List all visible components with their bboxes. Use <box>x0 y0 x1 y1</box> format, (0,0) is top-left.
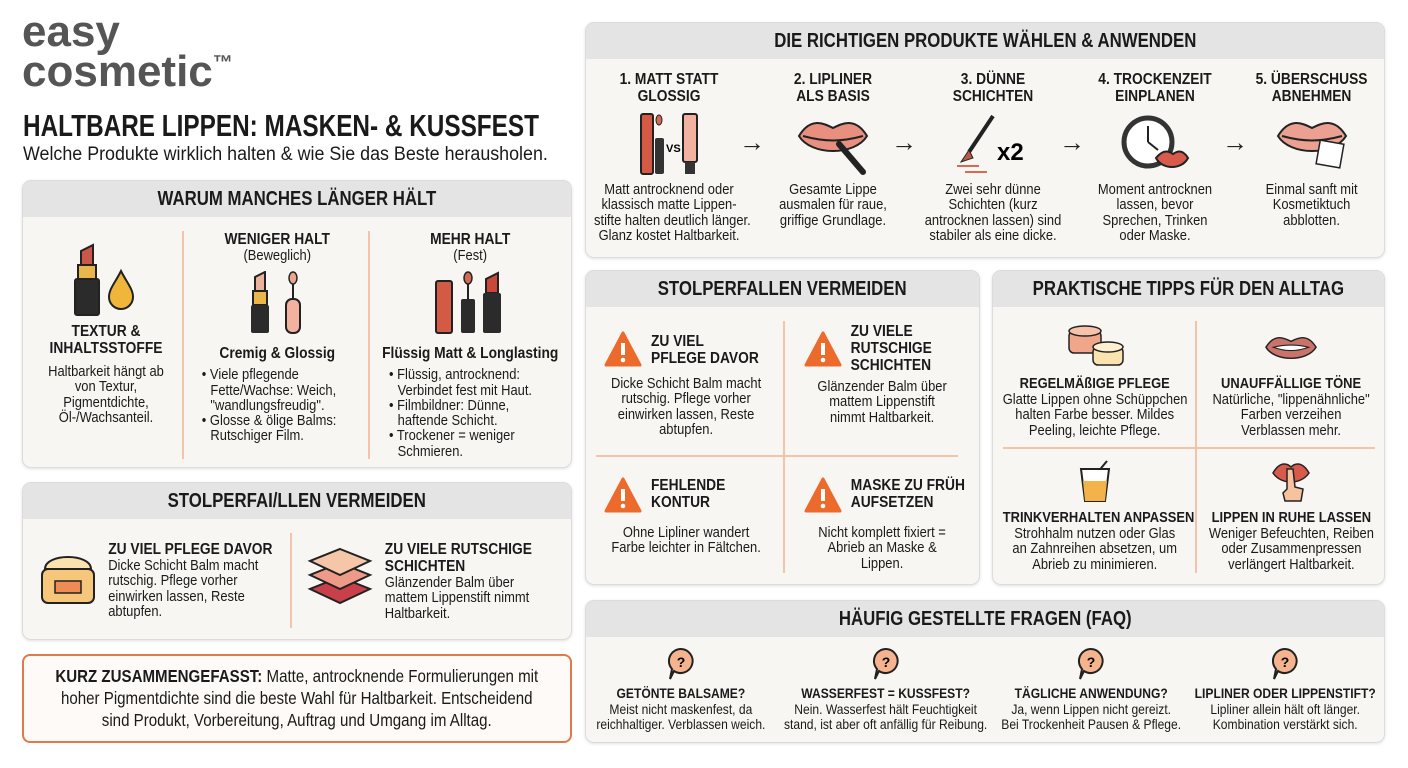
text: zu viel pflege: einwirken lassen, Reste <box>108 588 245 605</box>
faq 4: Kombination verstärkt sich. <box>1213 716 1357 732</box>
heading: PRAKTISCHE TIPPS FÜR DEN ALLTAG <box>1033 278 1344 300</box>
cell: maske zu früh: Nicht komplett fixiert = <box>818 524 946 541</box>
col3: • Trockener = weniger <box>389 427 515 444</box>
text: zu viel pflege: abtupfen. <box>108 603 162 620</box>
faq 3 <box>1001 648 1181 732</box>
cell: zu viele rutschige schichten: mattem Lippenstift <box>829 393 935 410</box>
col3: • Filmbildner: Dünne, <box>389 397 509 414</box>
col3 <box>382 231 558 460</box>
tip: lippen in ruhe lassen: oder Zusammenpressen <box>1221 540 1361 557</box>
text: zu viele rutschige schichten: SCHICHTEN <box>385 558 465 575</box>
summary callout: sind Produkt, Vorbereitung, Auftrag und Umgang im Alltag. <box>102 710 492 730</box>
cell: zu viele rutschige schichten: RUTSCHIGE <box>851 340 932 357</box>
step 1: klassisch matte Lippen- <box>601 196 737 213</box>
heading <box>586 271 979 307</box>
faq 4 <box>1194 648 1376 732</box>
step 1: Matt antrocknend oder <box>604 181 734 198</box>
cell: zu viel pflege: PFLEGE DAVOR <box>651 350 759 367</box>
heading: HÄUFIG GESTELLTE FRAGEN (FAQ) <box>839 608 1131 630</box>
heading: STOLPERFALLEN VERMEIDEN <box>658 278 907 300</box>
step 4: Moment antrocknen <box>1098 181 1212 198</box>
text: zu viele rutschige schichten: mattem Lippenstift nimmt <box>385 589 529 606</box>
tip: unauffällige töne: Verblassen mehr. <box>1241 422 1341 439</box>
col3: Schmieren. <box>398 443 463 460</box>
icon: matte vs gloss <box>640 113 698 175</box>
faq 4: ? <box>1281 654 1289 670</box>
step 3: Zwei sehr dünne <box>945 181 1041 198</box>
col3: Verbindet fest mit Haut. <box>398 382 532 399</box>
cell: zu viel pflege: ZU VIEL <box>651 333 704 350</box>
heading: DIE RICHTIGEN PRODUKTE WÄHLEN & ANWENDEN <box>774 30 1196 52</box>
step 3: 3. DÜNNE <box>961 71 1025 88</box>
col1 text <box>48 323 164 426</box>
tip: lippen in ruhe lassen <box>1208 463 1374 573</box>
summary callout: KURZ ZUSAMMENGEFASST: Matte, antrocknende Formulierungen mit <box>56 666 538 686</box>
col2: • Glosse & ölige Balms: <box>202 412 337 429</box>
faq 2: Nein. Wasserfest hält Feuchtigkeit <box>795 701 977 717</box>
cell: fehlende kontur: FEHLENDE <box>651 477 725 494</box>
col2: WENIGER HALT <box>224 231 330 248</box>
tip: trinkverhalten <box>1002 460 1195 573</box>
col2: Fette/Wachse: Weich, <box>211 382 336 399</box>
tip: regelmäßige pflege: REGELMÄßIGE PFLEGE <box>1020 375 1170 392</box>
faq 4: LIPLINER ODER LIPPENSTIFT? <box>1194 685 1376 701</box>
panel: stolperfallen links <box>22 482 572 640</box>
step 2: Gesamte Lippe <box>789 181 877 198</box>
arrow: → <box>1059 127 1085 157</box>
col3: • Flüssig, antrocknend: <box>389 366 520 383</box>
step 4: lassen, bevor <box>1117 196 1193 213</box>
col2 <box>202 231 337 444</box>
tip: lippen in ruhe lassen: verlängert Haltbarkeit. <box>1228 556 1354 573</box>
tip: trinkverhalten: Strohhalm nutzen oder Glas <box>1014 525 1176 542</box>
faq 3: ? <box>1087 654 1095 670</box>
summary callout <box>22 654 572 743</box>
step 4: oder Maske. <box>1119 227 1191 244</box>
icon: lips with liner <box>798 122 868 175</box>
icon: balm jar <box>41 556 95 604</box>
col1 text: Haltbarkeit hängt ab <box>48 363 164 380</box>
cell: maske zu früh: Lippen. <box>861 555 903 572</box>
text: zu viele rutschige schichten: Glänzender Balm über <box>385 574 514 591</box>
faq 2 <box>784 648 988 732</box>
arrow: → <box>891 127 917 157</box>
cell: zu viele rutschige schichten <box>804 323 947 426</box>
cell: maske zu früh: MASKE ZU FRÜH <box>851 477 965 494</box>
col3: MEHR HALT <box>430 231 510 248</box>
panel: praktische tipps <box>992 270 1385 585</box>
step 1: 1. MATT STATT <box>620 71 718 88</box>
col1 text: von Textur, <box>75 378 137 395</box>
icon: brush x2 <box>957 114 1024 173</box>
heading <box>993 271 1384 307</box>
faq 2: ? <box>882 654 890 670</box>
icon: clock and lips <box>1122 116 1190 168</box>
panel: stolperfallen vermeiden (rechts) <box>585 270 980 585</box>
tip: trinkverhalten: TRINKVERHALTEN ANPASSEN <box>1003 509 1195 526</box>
step 5: abblotten. <box>1284 212 1340 229</box>
step 2 <box>779 71 887 229</box>
tip: regelmäßige pflege: halten Farbe besser. Mildes <box>1016 406 1174 423</box>
heading: WARUM MANCHES LÄNGER HÄLT <box>158 188 436 210</box>
cell: zu viel pflege: rutschig. Pflege vorher <box>621 390 751 407</box>
tip: unauffällige töne: Farben verzeihen <box>1241 406 1341 423</box>
logo: cosmetic™ <box>22 47 233 96</box>
step 4: EINPLANEN <box>1115 88 1195 105</box>
cell: zu viele rutschige schichten: nimmt Haltbarkeit. <box>830 409 934 426</box>
col1 text: TEXTUR & <box>72 323 140 340</box>
step 1: stifte halten deutlich länger. <box>594 212 751 229</box>
heading <box>23 181 571 217</box>
cell: zu viel pflege: abtupfen. <box>659 421 713 438</box>
faq 2: WASSERFEST = KUSSFEST? <box>802 685 970 701</box>
step 3: Schichten (kurz <box>948 196 1038 213</box>
text: zu viel pflege: rutschig. Pflege vorher <box>108 572 237 589</box>
icon: lipstick and drop <box>74 243 134 316</box>
panel: FAQ <box>585 600 1385 743</box>
step 2: ALS BASIS <box>796 88 870 105</box>
cell: fehlende kontur: Farbe leichter in Fältchen. <box>611 539 761 556</box>
col2: • Viele pflegende <box>202 366 299 383</box>
tip: regelmäßige pflege: Glatte Lippen ohne Schüppchen <box>1003 391 1188 408</box>
col2: Rutschiger Film. <box>211 427 304 444</box>
text: zu viele rutschige schichten: Haltbarkeit. <box>385 605 450 622</box>
tip: trinkverhalten: Abrieb zu minimieren. <box>1032 556 1158 573</box>
text: zu viel pflege <box>108 541 272 620</box>
step 5 <box>1256 70 1368 229</box>
step 2: ausmalen für raue, <box>779 196 887 213</box>
tip: unauffällige töne <box>1212 337 1370 439</box>
arrow: → <box>1222 127 1248 157</box>
col3: Flüssig Matt & Longlasting <box>382 345 558 362</box>
icon: liquid matte and longlasting <box>435 271 501 334</box>
cell: maske zu früh <box>804 476 965 572</box>
text: zu viele rutschige schichten: ZU VIELE RUTSCHIGE <box>385 541 532 558</box>
icon: brush x2: x2 <box>997 139 1024 166</box>
col1 text: Öl-/Wachsanteil. <box>59 409 153 426</box>
cell: fehlende kontur <box>604 477 761 556</box>
tip: regelmäßige pflege <box>1003 325 1188 439</box>
text: zu viel pflege: ZU VIEL PFLEGE DAVOR <box>108 541 272 558</box>
faq 1: Meist nicht maskenfest, da <box>610 701 752 717</box>
col1 text: INHALTSSTOFFE <box>50 340 162 357</box>
col2: Cremig & Glossig <box>219 345 335 362</box>
cell: zu viel pflege: Dicke Schicht Balm macht <box>611 375 761 392</box>
step 1: GLOSSIG <box>638 88 700 105</box>
tip: lippen in ruhe lassen: Weniger Befeuchten, Reiben <box>1208 525 1374 542</box>
faq 1: reichhaltiger. Verblassen weich. <box>596 716 766 732</box>
text: zu viele rutschige schichten <box>385 541 532 622</box>
step 4: Sprechen, Trinken <box>1103 212 1207 229</box>
faq 1: GETÖNTE BALSAME? <box>617 685 745 701</box>
step 5: Kosmetiktuch <box>1273 196 1351 213</box>
col2: (Beweglich) <box>243 247 311 264</box>
title: HALTBARE LIPPEN: MASKEN- & KUSSFEST <box>23 108 539 143</box>
faq 3: Bei Trockenheit Pausen & Pflege. <box>1001 716 1181 732</box>
heading <box>586 601 1384 637</box>
heading <box>586 23 1384 59</box>
step 3: antrocknen lassen) sind <box>925 212 1061 229</box>
col1 text: Pigmentdichte, <box>63 394 149 411</box>
tip: unauffällige töne: Natürliche, "lippenähnliche" <box>1212 391 1370 408</box>
faq 3: TÄGLICHE ANWENDUNG? <box>1014 685 1168 701</box>
cell: zu viele rutschige schichten: Glänzender Balm über <box>817 378 947 395</box>
cell: fehlende kontur: Ohne Lipliner wandert <box>623 524 749 541</box>
panel: warum manches länger hält <box>22 180 572 468</box>
logo <box>22 7 233 96</box>
step 2: 2. LIPLINER <box>794 71 872 88</box>
step 4: 4. TROCKENZEIT <box>1098 71 1212 88</box>
tip: regelmäßige pflege: Peeling, leichte Pflege. <box>1029 422 1161 439</box>
text: zu viel pflege: Dicke Schicht Balm macht <box>108 557 258 574</box>
faq 4: Lipliner allein hält oft länger. <box>1210 701 1360 717</box>
faq 2: stand, ist aber oft anfällig für Reibung. <box>784 716 988 732</box>
panel: produkte wählen & anwenden <box>585 22 1385 258</box>
step 3: SCHICHTEN <box>953 88 1033 105</box>
icon: layers <box>308 548 372 604</box>
logo: easy <box>22 7 120 56</box>
col3: (Fest) <box>453 247 487 264</box>
subtitle: Welche Produkte wirklich halten & wie Sie das Beste herausholen. <box>23 144 548 165</box>
step 3 <box>925 70 1061 244</box>
tip: trinkverhalten: an Zahnreihen absetzen, um <box>1013 540 1177 557</box>
cell: zu viel pflege <box>604 331 762 438</box>
icon: cream lipstick and gloss <box>251 271 301 334</box>
step 4 <box>1098 71 1212 244</box>
cell: fehlende kontur: KONTUR <box>651 494 710 511</box>
cell: zu viel pflege: einwirken lassen, Reste <box>618 406 754 423</box>
icon: lips with tissue <box>1276 122 1348 169</box>
tip: lippen in ruhe lassen: LIPPEN IN RUHE LASSEN <box>1211 509 1371 526</box>
step 5: 5. ÜBERSCHUSS <box>1256 71 1368 88</box>
cell: maske zu früh: AUFSETZEN <box>851 494 934 511</box>
heading: STOLPERFAI/LLEN VERMEIDEN <box>168 490 426 512</box>
faq 1: ? <box>677 654 685 670</box>
step 1: Glanz kostet Haltbarkeit. <box>599 227 739 244</box>
step 5: Einmal sanft mit <box>1266 181 1358 198</box>
cell: zu viele rutschige schichten: ZU VIELE <box>851 323 913 340</box>
summary callout: hoher Pigmentdichte sind die beste Wahl für Haltbarkeit. Entscheidend <box>61 688 533 708</box>
faq 3: Ja, wenn Lippen nicht gereizt. <box>1011 701 1171 717</box>
arrow: → <box>739 127 765 157</box>
faq 1 <box>596 648 766 732</box>
icon: matte vs gloss: VS <box>666 143 681 155</box>
col2: "wandlungsfreudig". <box>211 397 325 414</box>
col3: haftende Schicht. <box>398 412 498 429</box>
cell: maske zu früh: Abrieb an Maske & <box>827 539 937 556</box>
heading <box>23 483 571 519</box>
step 2: griffige Grundlage. <box>780 212 886 229</box>
step 1 <box>594 71 751 244</box>
step 5: ABNEHMEN <box>1272 88 1352 105</box>
tip: unauffällige töne: UNAUFFÄLLIGE TÖNE <box>1221 375 1361 392</box>
cell: zu viele rutschige schichten: SCHICHTEN <box>851 357 931 374</box>
step 3: stabiler als eine dicke. <box>929 227 1057 244</box>
